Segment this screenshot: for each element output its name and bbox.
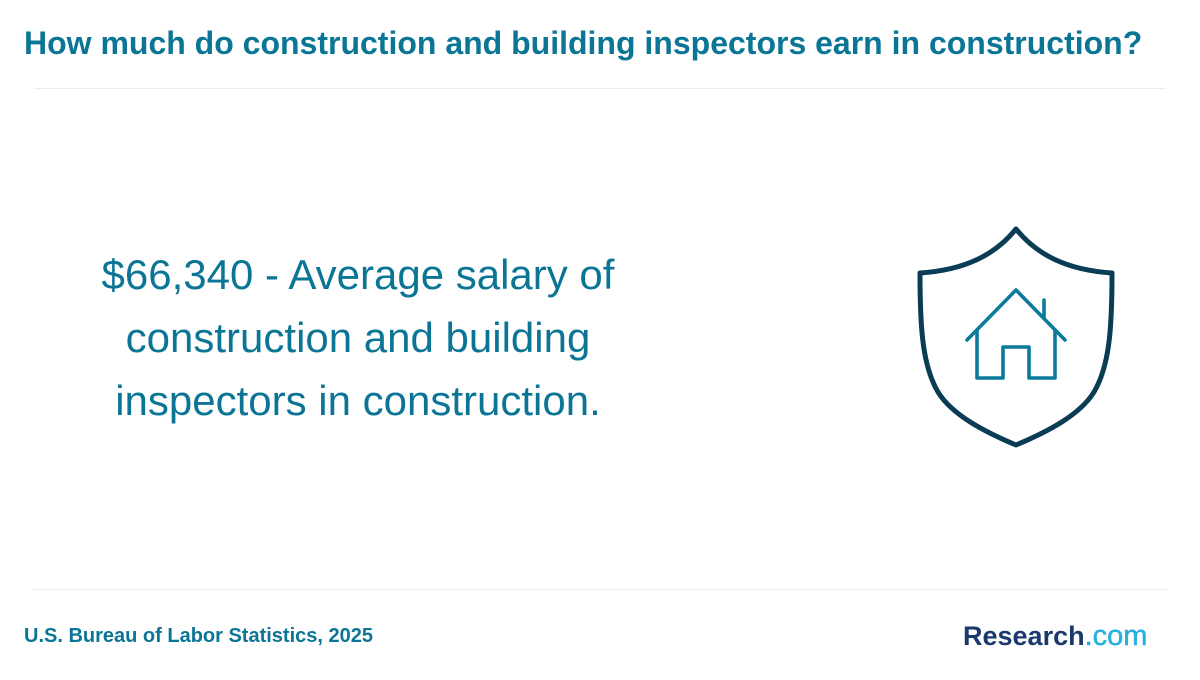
- house: [967, 290, 1065, 378]
- main statistic text: construction and building: [126, 314, 590, 361]
- shield outline: [920, 229, 1112, 445]
- icon: shield with house: [918, 226, 1114, 448]
- main statistic text: [102, 251, 614, 424]
- source: U.S. Bureau of Labor Statistics, 2025: [24, 625, 373, 647]
- main statistic text: $66,340 - Average salary of: [102, 251, 614, 298]
- main statistic text: inspectors in construction.: [115, 377, 601, 424]
- title: How much do construction and building inspectors earn in construction?: [24, 25, 1142, 61]
- logo: Research.com: [963, 620, 1147, 652]
